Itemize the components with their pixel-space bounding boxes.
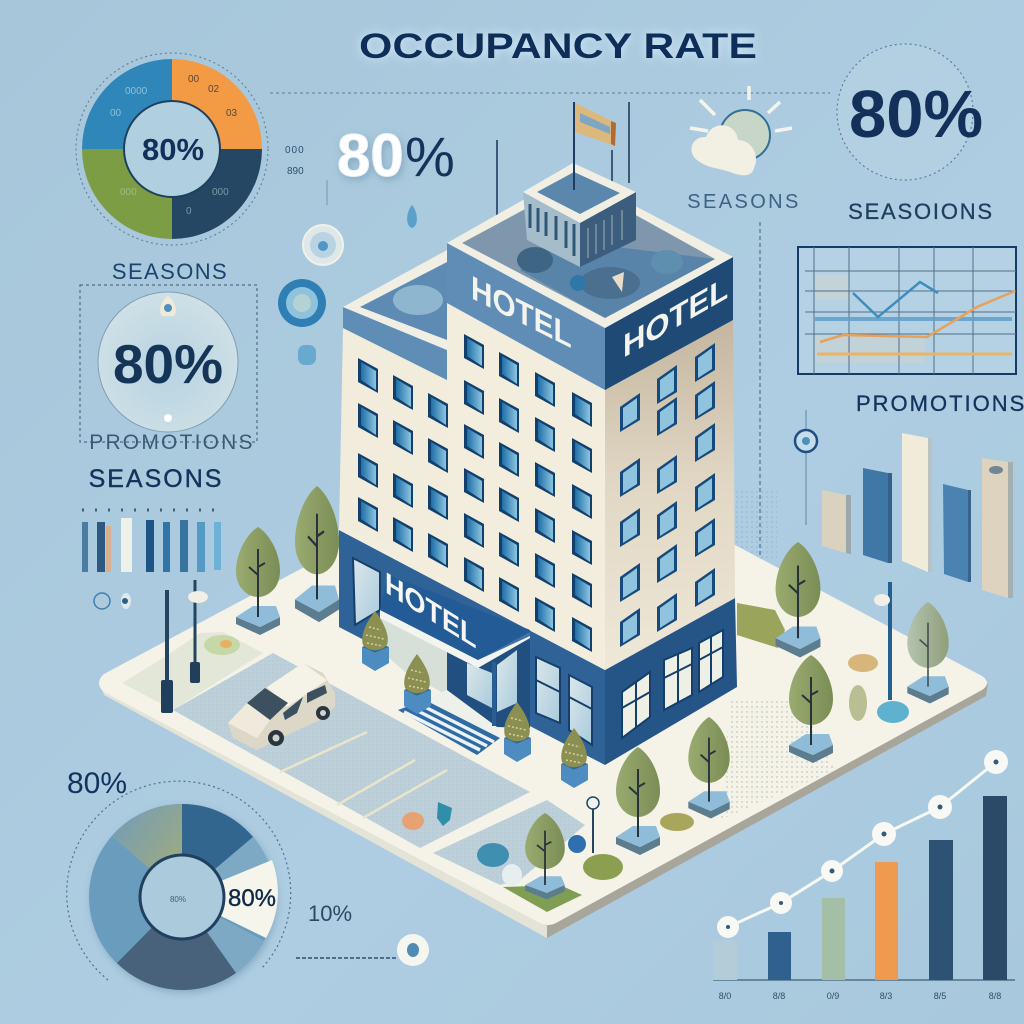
pie segment: navy	[172, 149, 262, 239]
windows: right face	[620, 343, 715, 647]
teal ornament	[437, 802, 452, 826]
axis labels: 8/0	[719, 991, 731, 1001]
axis labels: 8/5	[934, 991, 946, 1001]
icon: drop	[407, 205, 417, 228]
icon: circle drop	[303, 225, 343, 265]
canopy	[380, 565, 530, 668]
roof units	[517, 247, 553, 273]
white ornament	[502, 864, 522, 886]
trees	[236, 486, 949, 899]
ground plate	[99, 545, 988, 938]
shrub	[660, 813, 694, 831]
chart: left small bars	[82, 518, 221, 572]
pie centre value: 80%	[142, 132, 204, 167]
blue icon	[568, 835, 586, 853]
decorative blue blob	[298, 345, 316, 365]
small pie side labels: 890	[287, 166, 304, 177]
pie centre	[124, 101, 220, 197]
title: OCCUPANCY RATE	[359, 27, 757, 66]
roof surface	[462, 208, 715, 318]
hotel sign: roof left: HOTEL	[471, 269, 572, 356]
small pie side labels	[285, 145, 305, 177]
series: orange	[820, 291, 1015, 342]
plate left side	[100, 684, 547, 938]
pie segment: orange	[172, 59, 262, 149]
car body	[228, 663, 335, 750]
shrub lower	[583, 854, 623, 880]
fascia left	[447, 243, 605, 390]
axis labels: 8/3	[880, 991, 892, 1001]
trend line	[728, 762, 996, 927]
value: 80%	[849, 77, 983, 152]
planters	[362, 611, 588, 788]
top 80% value: 80	[337, 122, 404, 189]
segment: mid blue top	[182, 837, 272, 897]
donut centre label: 80%	[170, 895, 186, 904]
pie tiny labels: 0000	[125, 86, 148, 97]
panel: 80% bubble	[80, 285, 257, 442]
building: main tower	[339, 200, 735, 670]
tiny marks above bars	[82, 508, 220, 512]
building: wing	[339, 250, 447, 560]
panel: donut chart	[67, 781, 291, 990]
pie tiny labels: 000	[212, 187, 229, 198]
building: base storey	[339, 528, 737, 765]
percent sign: %	[405, 125, 455, 188]
car side windows	[283, 697, 303, 720]
pie tiny labels: 00	[188, 74, 200, 85]
hotel sign: roof right: HOTEL	[623, 269, 728, 366]
donut hole	[140, 855, 224, 939]
pie tiny labels: 02	[208, 84, 220, 95]
dashed vertical divider	[759, 222, 761, 560]
panel: right big 80%	[837, 44, 983, 180]
segment: white	[182, 860, 278, 938]
label: seasons top right: SEASONS	[687, 191, 801, 213]
label: bottom-left 80%: 80%	[67, 767, 127, 800]
bubble value: 80%	[113, 333, 223, 395]
chart: bottom-right bars and trend	[713, 750, 1015, 1001]
orange ornament	[402, 812, 424, 830]
wing wall	[339, 328, 447, 560]
map patch accent	[204, 635, 240, 655]
canopy hotel sign: HOTEL	[385, 565, 476, 656]
panel: top-left pie chart	[76, 53, 268, 245]
series: flat blue	[815, 317, 1012, 321]
flag poles and antenna	[497, 102, 629, 220]
car	[228, 663, 335, 750]
icon: white marker	[397, 934, 429, 966]
dotted connector line top	[270, 92, 830, 94]
pie segment: blue	[82, 59, 172, 149]
map patch orange	[220, 640, 232, 648]
bubble pin	[160, 296, 176, 316]
pie segment: green	[82, 149, 172, 239]
plaza halftone	[720, 700, 835, 820]
bars	[713, 940, 737, 980]
pie tiny labels	[110, 74, 238, 217]
brown ornament	[848, 654, 878, 672]
door panes	[467, 663, 492, 708]
pie tiny labels: 000	[120, 187, 137, 198]
donut base	[89, 804, 275, 990]
left wall	[339, 303, 605, 670]
dashed connector	[296, 957, 398, 959]
pie tiny labels: 03	[226, 108, 238, 119]
green patch near wall	[737, 603, 785, 648]
flag	[574, 102, 616, 190]
building: penthouse	[523, 163, 636, 267]
base ledge	[339, 528, 735, 668]
base left face	[339, 530, 605, 765]
halftone patch	[735, 488, 777, 560]
icon: blue ring	[278, 279, 326, 327]
car windshield	[247, 688, 288, 720]
bubble circle	[98, 292, 238, 432]
blue puddle	[877, 701, 909, 723]
parking lot	[173, 653, 530, 848]
axis	[713, 979, 1015, 981]
axis labels: 8/8	[989, 991, 1001, 1001]
donut value: 80%	[228, 885, 276, 912]
door wall	[447, 640, 530, 728]
segment: dark blue	[182, 804, 253, 897]
plate top	[99, 545, 987, 925]
right wall	[605, 320, 735, 670]
axis labels	[719, 991, 1001, 1001]
trend markers	[717, 750, 1008, 938]
landscaped map patch	[122, 632, 263, 710]
icon: sun and cloud	[690, 86, 792, 175]
label: promotions left: PROMOTIONS	[89, 431, 255, 454]
car roof and hood	[267, 663, 327, 707]
plate right side	[547, 684, 988, 938]
lamp posts	[161, 580, 890, 853]
lower parking	[433, 800, 585, 885]
label: seasons left bold: SEASONS	[89, 465, 223, 493]
series: yellow	[817, 352, 1012, 356]
segment: mid blue low	[182, 897, 264, 973]
line chart panel	[798, 247, 1016, 374]
axis labels: 0/9	[827, 991, 839, 1001]
green patch by tree	[503, 885, 582, 912]
label: seasons left: SEASONS	[112, 259, 228, 284]
icon: pin	[326, 180, 328, 205]
segment: olive	[112, 804, 182, 897]
bubble lower dot	[164, 414, 172, 422]
segment: slate	[117, 897, 236, 990]
pie tiny labels: 00	[110, 108, 122, 119]
wing fascia	[343, 307, 447, 380]
label: promotions right: PROMOTIONS	[856, 391, 1024, 416]
car wheels	[268, 730, 284, 746]
label: seasioins right: SEASOIONS	[848, 199, 994, 224]
windows: left face	[358, 334, 592, 652]
feather ornament	[849, 685, 867, 721]
pie tiny labels: 0	[186, 206, 192, 217]
bubble pin dot	[164, 304, 172, 312]
entrance steps	[398, 662, 500, 755]
chart: 3D bars right	[822, 433, 1013, 598]
wing roof	[360, 262, 447, 340]
windows: base left	[353, 558, 380, 625]
small pie side labels: 000	[285, 145, 305, 156]
wing roof unit	[393, 285, 443, 315]
parking bay lines	[280, 732, 447, 818]
fascia right	[605, 257, 733, 390]
series: peak blue	[853, 282, 938, 317]
lower teal ornament	[477, 843, 509, 867]
base right face	[605, 598, 737, 765]
icon: marker	[795, 410, 817, 525]
windows: base right	[622, 630, 723, 738]
recess under canopy	[380, 615, 447, 695]
small 10% label: 10%	[308, 901, 352, 926]
small icons below bars	[94, 593, 131, 609]
top 80% value	[337, 122, 455, 189]
axis labels: 8/8	[773, 991, 785, 1001]
wing roof parapet	[343, 250, 447, 350]
roof parapet	[447, 200, 733, 328]
